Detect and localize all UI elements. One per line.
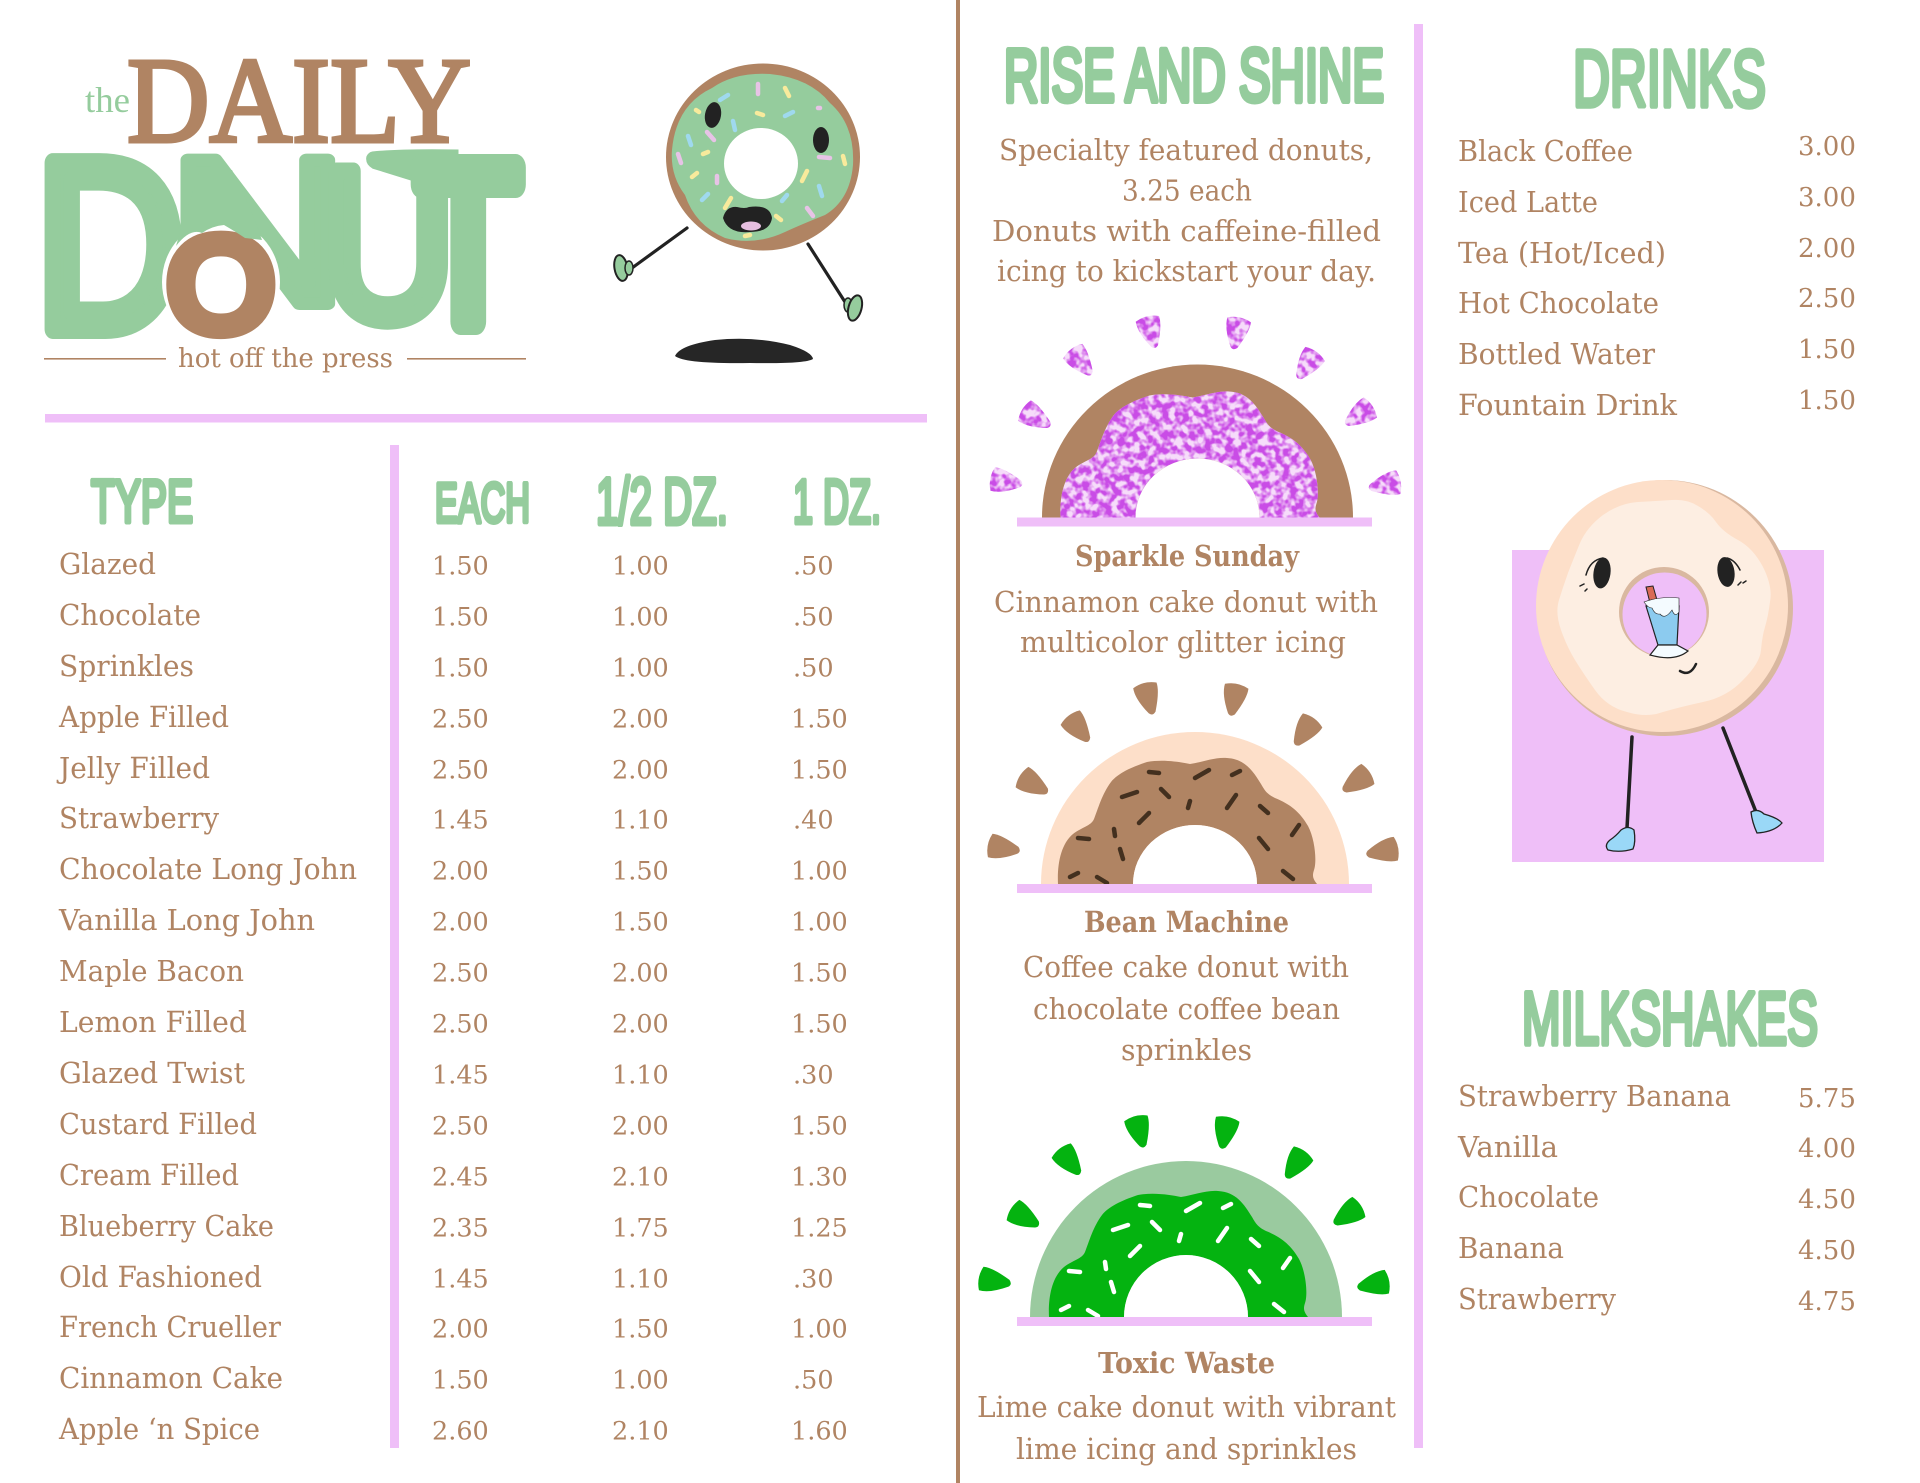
- row: Strawberry Banana: 5.75: [1798, 1084, 1856, 1114]
- base bar: [1017, 518, 1372, 526]
- row: Chocolate: .50: [793, 602, 834, 632]
- row: Strawberry: Strawberry: [1458, 1282, 1617, 1316]
- divider: right column pink bar: [1414, 24, 1423, 1448]
- base: [1650, 645, 1688, 658]
- divider: header pink bar: [45, 414, 927, 422]
- row: Vanilla Long John: 1.50: [612, 908, 669, 938]
- shadow: [675, 339, 813, 363]
- row: Fountain Drink: [1458, 386, 1856, 422]
- logo tagline rule right: [407, 358, 526, 360]
- icon: sparkle donut: [988, 314, 1403, 518]
- row: Jelly Filled: [56, 751, 848, 786]
- logo tagline: hot off the press: [178, 344, 393, 374]
- row: Glazed Twist: .30: [793, 1060, 834, 1090]
- row: Apple Filled: [58, 700, 848, 734]
- intro text: 3.25 each: [1122, 174, 1252, 208]
- row: Blueberry Cake: 1.25: [791, 1214, 848, 1244]
- donut base: [1042, 364, 1353, 518]
- row: Glazed Twist: 1.45: [432, 1060, 489, 1090]
- row: Apple 'n Spice: [58, 1412, 848, 1446]
- panel: Drinks: [1458, 34, 1856, 422]
- row: Glazed: [59, 547, 834, 582]
- donut hole: [1124, 1255, 1248, 1317]
- logo word: the: the: [85, 80, 130, 120]
- row: French Cruller: 1.00: [791, 1314, 848, 1344]
- row: Chocolate: Chocolate: [59, 598, 201, 632]
- row: Apple Filled: 2.00: [612, 704, 669, 734]
- row: Strawberry: [1458, 1282, 1856, 1317]
- row: Lemon Filled: 1.50: [791, 1010, 848, 1040]
- row: Tea: [1458, 234, 1856, 270]
- row: Cinnamon Cake: [59, 1361, 834, 1396]
- row: Vanilla Long John: 2.00: [432, 908, 489, 938]
- chocolate icing: [1058, 758, 1317, 884]
- row: Black Coffee: [1458, 132, 1856, 168]
- column headings: donut table: [91, 464, 881, 538]
- description: [994, 585, 1378, 659]
- donut base: [1030, 1161, 1342, 1317]
- row: Banana: [1458, 1231, 1856, 1266]
- heading: 1 DZ.: 1 DZ.: [793, 468, 881, 537]
- row: Vanilla Long John: [58, 903, 848, 938]
- logo word: DAILY: DAILY: [127, 34, 471, 168]
- row: French Cruller: [59, 1310, 848, 1344]
- green icing: [672, 74, 853, 241]
- row: Blueberry Cake: Blueberry Cake: [59, 1209, 274, 1243]
- right hand: [844, 294, 865, 322]
- logo letter: T: T: [417, 119, 520, 369]
- milkshake: [1644, 586, 1688, 658]
- row: Fountain Drink: 1.50: [1798, 386, 1856, 416]
- name: Bean Machine: [1084, 905, 1289, 939]
- row: Jelly Filled: 2.00: [612, 756, 669, 786]
- row: Strawberry: 1.45: [432, 806, 489, 836]
- row: Jelly Filled: 2.50: [432, 756, 489, 786]
- row: Glazed: Glazed: [59, 547, 156, 581]
- sprinkles: [678, 84, 845, 236]
- heading: EACH: EACH: [435, 471, 530, 534]
- row: Hot Chocolate: [1458, 284, 1856, 320]
- panel: Sparkle Sunday: [988, 314, 1403, 659]
- panel: Milkshakes: [1457, 977, 1856, 1317]
- logo O white outline: [162, 220, 280, 344]
- icon: peach donut with milkshake: [1512, 480, 1824, 862]
- donut base: [1536, 480, 1788, 732]
- icon: coffee donut: [985, 680, 1400, 884]
- row: Strawberry: [59, 801, 834, 836]
- row: Sprinkles: 1.50: [432, 654, 489, 684]
- row: Chocolate Long John: Chocolate Long John: [59, 852, 357, 886]
- heading: Rise and Shine: RISE AND SHINE: [1004, 34, 1384, 117]
- left hand: [612, 254, 633, 282]
- description: Cinnamon cake donut with: [994, 585, 1378, 619]
- row: Banana: 4.50: [1798, 1236, 1856, 1266]
- row: Cinnamon Cake: 1.00: [612, 1366, 669, 1396]
- row: Custard Filled: 2.00: [612, 1112, 669, 1142]
- donut hole: [1133, 825, 1257, 884]
- row: Apple 'n Spice: 2.10: [612, 1416, 669, 1446]
- glass: [1646, 606, 1679, 645]
- left shoe: [1606, 828, 1635, 851]
- row: Lemon Filled: 2.50: [432, 1010, 489, 1040]
- heading: TYPE: TYPE: [91, 468, 193, 535]
- row: Maple Bacon: 2.50: [432, 958, 489, 988]
- row: Custard Filled: [59, 1107, 848, 1142]
- description: chocolate coffee bean: [1033, 992, 1340, 1026]
- row: Sprinkles: .50: [793, 654, 834, 684]
- row: Black Coffee: Black Coffee: [1458, 134, 1633, 168]
- row: Glazed Twist: Glazed Twist: [59, 1056, 245, 1090]
- row: Maple Bacon: 2.00: [612, 958, 669, 988]
- sprinkles: [1070, 770, 1299, 883]
- smile: [1680, 664, 1696, 673]
- row: Chocolate: [59, 598, 834, 632]
- panel: Bean Machine: [985, 680, 1400, 1067]
- cream: [1644, 598, 1679, 616]
- table: donut prices: [56, 547, 848, 1446]
- rays: [976, 1113, 1391, 1299]
- row: Vanilla Long John: Vanilla Long John: [58, 903, 315, 937]
- base bar: [1017, 884, 1372, 893]
- description: [977, 1390, 1396, 1466]
- row: Cinnamon Cake: Cinnamon Cake: [59, 1361, 283, 1395]
- row: Strawberry: 4.75: [1798, 1287, 1856, 1317]
- row: Cream Filled: 1.30: [791, 1162, 848, 1192]
- row: Blueberry Cake: 1.75: [612, 1214, 669, 1244]
- row: Iced Latte: [1458, 183, 1856, 219]
- description: Lime cake donut with vibrant: [977, 1390, 1396, 1424]
- row: Bottled Water: Bottled Water: [1458, 337, 1655, 371]
- row: Sprinkles: Sprinkles: [59, 649, 194, 683]
- donut hole: [1136, 458, 1260, 518]
- icing: [1557, 500, 1771, 715]
- row: Cream Filled: 2.45: [432, 1162, 489, 1192]
- row: French Cruller: 2.00: [432, 1314, 489, 1344]
- row: Lemon Filled: Lemon Filled: [59, 1005, 247, 1039]
- row: French Cruller: French Crueller: [59, 1310, 281, 1344]
- row: Chocolate: [1458, 1180, 1856, 1215]
- hole: [1622, 572, 1706, 656]
- panel: Toxic Waste: [976, 1113, 1396, 1466]
- donut shadow: [1537, 480, 1793, 736]
- row: Jelly Filled: Jelly Filled: [56, 751, 210, 785]
- description: [1023, 950, 1349, 1067]
- row: Chocolate Long John: 1.00: [791, 856, 848, 886]
- rays: [988, 314, 1403, 499]
- straw: [1646, 586, 1657, 603]
- name: Toxic Waste: [1098, 1346, 1275, 1380]
- row: Old Fashioned: 1.10: [612, 1264, 669, 1294]
- row: Chocolate Long John: [59, 852, 848, 886]
- row: Cream Filled: Cream Filled: [59, 1158, 239, 1192]
- row: Sprinkles: 1.00: [612, 654, 669, 684]
- row: Apple 'n Spice: Apple ‘n Spice: [58, 1412, 260, 1446]
- row: Chocolate: Chocolate: [1458, 1180, 1599, 1214]
- row: Chocolate: 4.50: [1798, 1185, 1856, 1215]
- row: Glazed: 1.50: [432, 552, 489, 582]
- tongue: [741, 222, 761, 230]
- row: Vanilla: Vanilla: [1457, 1130, 1558, 1164]
- left eye: [703, 101, 723, 129]
- row: Hot Chocolate: Hot Chocolate: [1458, 286, 1659, 320]
- donut base: [1041, 732, 1349, 884]
- description: Coffee cake donut with: [1023, 950, 1349, 984]
- panel: Rise and Shine intro: [992, 34, 1384, 288]
- divider: table pink bar: [390, 445, 399, 1448]
- lime icing: [1049, 1191, 1308, 1317]
- row: Tea: Tea (Hot/Iced): [1458, 236, 1666, 270]
- donut hole: [724, 128, 798, 199]
- lashes: [1580, 558, 1746, 591]
- row: Blueberry Cake: [59, 1209, 848, 1244]
- intro text: Specialty featured donuts,: [999, 133, 1373, 167]
- logo letter: O: O: [168, 212, 274, 358]
- heading: 1/2 DZ.: 1/2 DZ.: [596, 464, 728, 538]
- row: Custard Filled: Custard Filled: [59, 1107, 257, 1141]
- icon: lime donut: [976, 1113, 1391, 1317]
- row: Strawberry: .40: [793, 806, 834, 836]
- logo tagline rule left: [44, 358, 166, 360]
- row: Vanilla Long John: 1.00: [791, 908, 848, 938]
- description: lime icing and sprinkles: [1016, 1432, 1357, 1466]
- row: Iced Latte: 3.00: [1798, 183, 1856, 213]
- row: Chocolate Long John: 1.50: [612, 856, 669, 886]
- icon: jumping green donut character: [612, 64, 865, 363]
- description: sprinkles: [1121, 1033, 1252, 1067]
- row: Apple 'n Spice: 1.60: [791, 1416, 848, 1446]
- right eye: [813, 127, 829, 153]
- row: Maple Bacon: [59, 954, 848, 988]
- row: Apple Filled: 2.50: [432, 704, 489, 734]
- row: Lemon Filled: 2.00: [612, 1010, 669, 1040]
- row: Apple Filled: 1.50: [791, 704, 848, 734]
- row: Iced Latte: Iced Latte: [1458, 185, 1598, 219]
- row: Glazed: 1.00: [612, 552, 669, 582]
- row: Cinnamon Cake: .50: [793, 1366, 834, 1396]
- row: Banana: Banana: [1458, 1231, 1564, 1265]
- row: Strawberry: 1.10: [612, 806, 669, 836]
- row: Chocolate Long John: 2.00: [432, 856, 489, 886]
- row: Apple Filled: Apple Filled: [58, 700, 229, 734]
- name: Sparkle Sunday: [1075, 539, 1300, 573]
- right eye: [1715, 556, 1737, 588]
- row: Sprinkles: [59, 649, 834, 684]
- row: Black Coffee: 3.00: [1798, 132, 1856, 162]
- row: Lemon Filled: [59, 1005, 848, 1040]
- row: Chocolate: 1.50: [432, 602, 489, 632]
- row: Cinnamon Cake: 1.50: [432, 1366, 489, 1396]
- legs: [1627, 728, 1756, 828]
- logo: The Daily Donut: [36, 34, 526, 381]
- heading: Drinks: DRINKS: [1573, 34, 1766, 123]
- rays: [985, 680, 1400, 866]
- row: Custard Filled: 2.50: [432, 1112, 489, 1142]
- arms and legs: [632, 228, 845, 302]
- row: Old Fashioned: .30: [793, 1264, 834, 1294]
- logo icing drip over O: [176, 170, 262, 246]
- row: Jelly Filled: 1.50: [791, 756, 848, 786]
- description: multicolor glitter icing: [1020, 625, 1346, 659]
- row: Hot Chocolate: 2.50: [1798, 284, 1856, 314]
- row: Apple 'n Spice: 2.60: [432, 1416, 489, 1446]
- row: Old Fashioned: [59, 1260, 834, 1294]
- left eye: [1591, 556, 1613, 590]
- row: Glazed Twist: [59, 1056, 834, 1090]
- mouth: [723, 206, 772, 232]
- right shoe: [1751, 810, 1782, 833]
- hole rim: [1619, 567, 1709, 657]
- glitter icing: [1060, 391, 1320, 518]
- base bar: [1017, 1317, 1372, 1326]
- row: Bottled Water: [1458, 335, 1856, 371]
- logo T left bar: [365, 148, 460, 192]
- row: Strawberry Banana: Strawberry Banana: [1458, 1079, 1731, 1113]
- row: Maple Bacon: Maple Bacon: [59, 954, 244, 988]
- divider: brown centre line: [956, 0, 960, 1483]
- logo letter: U: U: [322, 126, 455, 365]
- row: Cream Filled: 2.10: [612, 1162, 669, 1192]
- row: Glazed Twist: 1.10: [612, 1060, 669, 1090]
- intro text: Donuts with caffeine-filled: [992, 214, 1381, 248]
- row: Old Fashioned: 1.45: [432, 1264, 489, 1294]
- row: Fountain Drink: Fountain Drink: [1458, 388, 1677, 422]
- row: Vanilla: 4.00: [1798, 1134, 1856, 1164]
- row: Vanilla: [1457, 1130, 1856, 1164]
- row: Old Fashioned: Old Fashioned: [59, 1260, 262, 1294]
- row: Blueberry Cake: 2.35: [432, 1214, 489, 1244]
- donut body: [666, 64, 860, 250]
- row: Glazed: .50: [793, 552, 834, 582]
- intro text: [992, 133, 1381, 288]
- row: Chocolate: 1.00: [612, 602, 669, 632]
- row: Custard Filled: 1.50: [791, 1112, 848, 1142]
- sprinkles: [1061, 1203, 1290, 1316]
- row: French Cruller: 1.50: [612, 1314, 669, 1344]
- row: Cream Filled: [59, 1158, 848, 1192]
- logo letter: N: N: [168, 114, 348, 348]
- intro text: icing to kickstart your day.: [997, 254, 1376, 288]
- row: Bottled Water: 1.50: [1798, 335, 1856, 365]
- logo letter: D: D: [36, 111, 183, 381]
- pink square: [1512, 550, 1824, 862]
- row: Strawberry: Strawberry: [59, 801, 220, 835]
- row: Maple Bacon: 1.50: [791, 958, 848, 988]
- row: Tea: 2.00: [1798, 234, 1856, 264]
